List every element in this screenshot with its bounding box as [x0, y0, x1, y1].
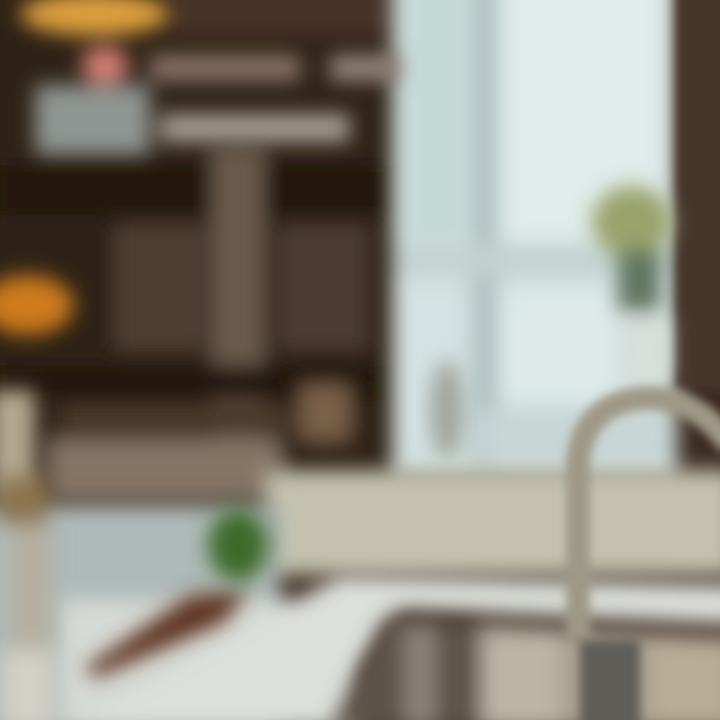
panel: dark wooden shelving — [0, 0, 395, 500]
panel: white countertop — [0, 505, 720, 720]
icon: potted plant on the windowsill — [592, 186, 672, 380]
icon: wooden board with green herbs — [85, 509, 268, 678]
panel: dark right pillar — [676, 0, 720, 390]
icon: blurred foreground bottle at left — [0, 390, 55, 720]
panel: cream backsplash — [265, 470, 720, 575]
icon: faucet — [578, 398, 720, 720]
icon: orange items on the top shelf — [20, 0, 400, 155]
icon: sink basin — [330, 618, 720, 720]
icon: small bottle on the sill — [430, 360, 464, 460]
icon: orange items on the lower shelf — [0, 275, 74, 335]
panel: bright window — [392, 0, 677, 480]
